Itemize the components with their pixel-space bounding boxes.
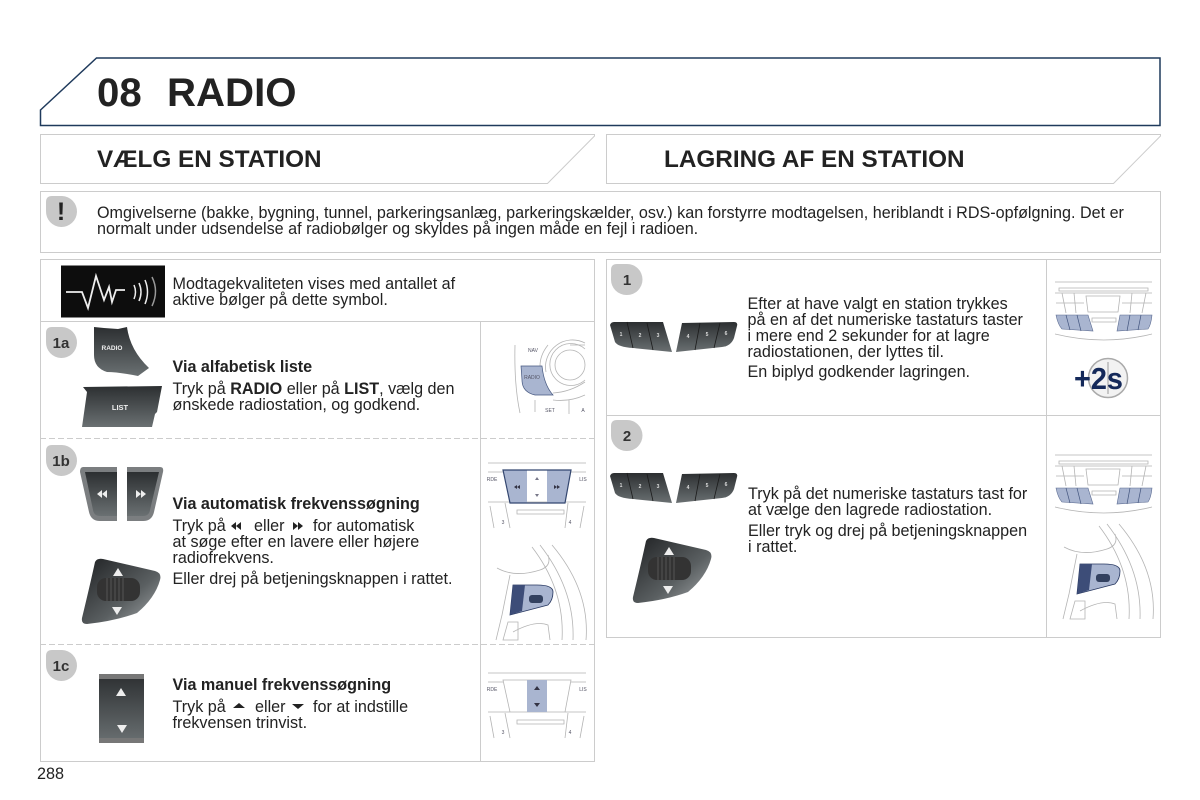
- text: automatic search: Tryk på: [172, 517, 226, 535]
- notice text: normalt under udsendelse af radiobølger og skyldes på ingen måde en fejl i radioen.: [97, 220, 698, 238]
- text: recall station: at vælge den lagrede radiostation.: [748, 501, 992, 519]
- text: store station: på en af det numeriske tastaturs taster: [748, 311, 1024, 329]
- icon: numeric keys second: 3: [657, 484, 660, 490]
- icon: up down button: [99, 674, 144, 743]
- badge: 1a: 1a: [53, 335, 70, 352]
- text: alphabetical list: ønskede radiostation, og godkend.: [172, 396, 420, 414]
- badge: 1c: 1c: [53, 658, 69, 675]
- icon: numeric keys: [610, 322, 737, 352]
- badge: 1: 1: [623, 272, 631, 289]
- text: recall station: Eller tryk og drej på betjeningsknappen: [748, 522, 1027, 540]
- icon: RADIO button: [94, 327, 149, 376]
- chapter title: RADIO: [167, 70, 296, 115]
- text: alphabetical list: [172, 358, 454, 414]
- diagram: up down keys on panel: [487, 673, 587, 738]
- text: manual search: eller: [255, 698, 286, 716]
- icon: numeric keys: 5: [706, 332, 709, 338]
- text: recall station: [748, 485, 1028, 556]
- diagram: up down keys on panel: 3: [502, 730, 505, 736]
- icon: numeric keys second: 1: [620, 483, 623, 489]
- diagram: seek keys on panel: 3: [502, 520, 505, 526]
- badge: 1c: [46, 650, 77, 681]
- text: automatic search: for automatisk: [313, 517, 415, 535]
- icon: seek buttons: [80, 467, 163, 521]
- diagram: radio panel: NAV: [528, 348, 539, 354]
- text: automatic search: [172, 495, 452, 588]
- diagram: preset keys second: [1055, 455, 1152, 513]
- text: automatic search: at søge efter en lavere eller højere: [172, 533, 419, 551]
- text: automatic search: Via automatisk frekvenssøgning: [172, 495, 420, 513]
- icon: numeric keys second: 4: [687, 485, 690, 491]
- text: store station: Efter at have valgt en station trykkes: [748, 295, 1008, 313]
- diagram: seek keys on panel: LIS: [579, 477, 587, 483]
- icon: numeric keys second: 2: [639, 484, 642, 490]
- icon: steering wheel knob: [82, 559, 160, 624]
- text: alphabetical list: Tryk på RADIO eller på LIST, vælg den: [172, 380, 454, 398]
- diagram: up down keys on panel: 4: [569, 730, 572, 736]
- icon: reception symbol: [61, 266, 165, 318]
- diagram: up down keys on panel: RDE: [487, 687, 498, 693]
- text: reception description: Modtagekvaliteten vises med antallet af: [172, 275, 456, 293]
- text: manual search: for at indstille: [313, 698, 408, 716]
- panel: notice: [40, 192, 1160, 252]
- icon: plus two seconds: +2s: [1074, 361, 1123, 396]
- section heading: left: VÆLG EN STATION: [97, 146, 322, 173]
- diagram: radio panel: RADIO: [524, 375, 540, 381]
- panel: left steps: [40, 260, 595, 762]
- notice text: Omgivelserne (bakke, bygning, tunnel, parkeringsanlæg, parkeringskælder, osv.) kan forstyrre modtagelsen, heriblandt i RDS-opfølgning. Det er: [97, 204, 1125, 222]
- text: manual search: Tryk på: [172, 698, 226, 716]
- diagram: seek keys on panel: [487, 463, 587, 528]
- diagram: steering wheel control: [496, 545, 586, 640]
- icon: numeric keys: 6: [725, 331, 728, 337]
- icon: numeric keys: 2: [639, 333, 642, 339]
- diagram: steering wheel control second: [1063, 524, 1153, 619]
- icon: numeric keys: 4: [687, 334, 690, 340]
- chapter number: 08: [97, 70, 142, 115]
- text: recall station: i rattet.: [748, 538, 797, 556]
- page number: 288: [37, 765, 64, 783]
- badge: 1b: 1b: [52, 453, 70, 470]
- text: store station: [748, 295, 1024, 381]
- badge: 1: [611, 264, 642, 295]
- icon: LIST button: LIST: [112, 403, 129, 412]
- text: store station: i mere end 2 sekunder for at lagre: [748, 327, 990, 345]
- diagram: up down keys on panel: LIS: [579, 687, 587, 693]
- text: automatic search: Eller drej på betjeningsknappen i rattet.: [172, 570, 452, 588]
- icon: numeric keys second: 5: [706, 483, 709, 489]
- badge: 2: [611, 420, 642, 451]
- section heading: left: [40, 134, 594, 184]
- icon: RADIO button: RADIO: [102, 345, 122, 352]
- section heading: right: LAGRING AF EN STATION: [664, 146, 965, 173]
- icon: warning badge: [46, 196, 77, 227]
- diagram: seek keys on panel: 4: [569, 520, 572, 526]
- text: store station: radiostationen, der lyttes til.: [748, 343, 944, 361]
- badge: 1a: [46, 327, 77, 358]
- text: manual search: frekvensen trinvist.: [172, 714, 307, 732]
- icon: numeric keys: 1: [620, 332, 623, 338]
- badge: 1b: [46, 445, 77, 476]
- title banner: [40, 58, 1160, 126]
- text: alphabetical list: Via alfabetisk liste: [172, 358, 312, 376]
- icon: LIST button: [82, 386, 162, 427]
- text: reception description: [172, 275, 456, 309]
- icon: numeric keys: 3: [657, 333, 660, 339]
- notice text: [97, 204, 1125, 238]
- icon: numeric keys second: [610, 473, 737, 503]
- text: store station: En biplyd godkender lagringen.: [748, 363, 970, 381]
- diagram: seek keys on panel: RDE: [487, 477, 498, 483]
- text: automatic search: radiofrekvens.: [172, 549, 274, 567]
- text: manual search: [172, 676, 408, 732]
- diagram: radio panel: [515, 340, 585, 414]
- text: automatic search: eller: [254, 517, 285, 535]
- icon: numeric keys second: 6: [725, 482, 728, 488]
- panel: right steps: [606, 260, 1161, 638]
- diagram: radio panel: A: [581, 408, 585, 414]
- badge: 2: 2: [623, 428, 631, 445]
- text: reception description: aktive bølger på dette symbol.: [172, 291, 388, 309]
- section heading: right: [606, 134, 1160, 184]
- diagram: preset keys highlighted: [1055, 282, 1152, 340]
- text: manual search: Via manuel frekvenssøgning: [172, 676, 391, 694]
- icon: warning badge: !: [57, 198, 65, 226]
- icon: steering wheel knob second: [633, 538, 711, 603]
- text: recall station: Tryk på det numeriske tastaturs tast for: [748, 485, 1028, 503]
- diagram: radio panel: SET: [545, 408, 555, 414]
